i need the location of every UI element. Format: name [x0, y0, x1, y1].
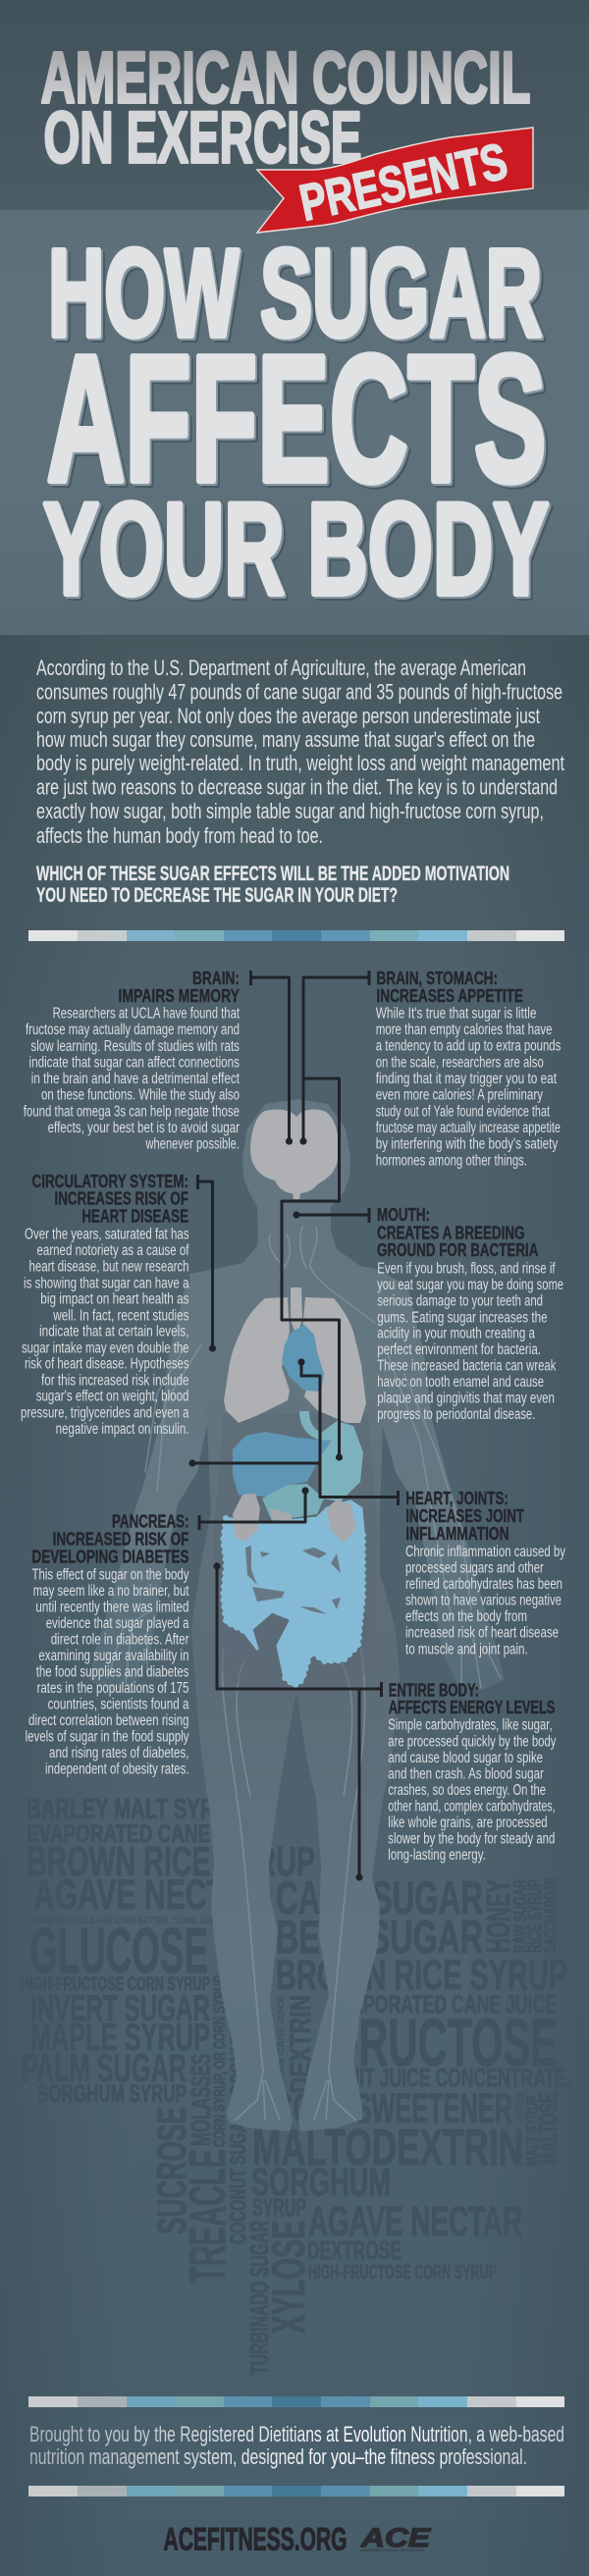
callout: mouth	[377, 1204, 563, 1423]
organ: heart	[282, 1325, 324, 1392]
organ: kidneys and pancreas	[233, 1494, 356, 1543]
heading: heart joints: INFLAMMATION	[405, 1523, 509, 1544]
word cloud: sugar names	[21, 1794, 571, 2375]
text: brain body: indicate that sugar can affect connections	[29, 1055, 240, 1072]
text block: footer credit	[29, 2422, 564, 2469]
connector lines	[188, 971, 399, 1881]
connector: pancreas	[199, 1487, 309, 1530]
text: brain stomach body: While It's true that sugar is little	[376, 1005, 536, 1022]
word cloud: sugar names: RAW SUGAR	[510, 1879, 530, 1953]
heading: brain: IMPAIRS MEMORY	[118, 985, 240, 1006]
word cloud: sugar names: GLUCOSE	[29, 1915, 208, 1986]
text: pancreas body: independent of obesity rates.	[45, 1761, 188, 1777]
body: veins	[108, 1227, 501, 2120]
text: circulatory body: earned notoriety as a cause of	[37, 1242, 189, 1259]
text: pancreas body: countries, scientists found a	[48, 1696, 189, 1712]
panel: main background	[0, 635, 589, 2576]
text: heart joints body	[405, 1544, 565, 1657]
text: brain stomach body: hormones among other things.	[376, 1152, 527, 1169]
text: circulatory body: Over the years, saturated fat has	[25, 1227, 189, 1243]
text: brain body: Researchers at UCLA have found that	[53, 1005, 241, 1022]
connector: mouth	[293, 1208, 369, 1223]
organ: duodenum	[262, 1484, 324, 1521]
text: brain body: in the brain and have a detrimental effect	[31, 1071, 241, 1087]
colour strip: top	[28, 930, 564, 941]
text: pancreas body: evidence that sugar played a	[46, 1615, 189, 1632]
heading: mouth: MOUTH:	[377, 1204, 430, 1225]
icon: ACE logo: ACE	[360, 2523, 431, 2552]
word cloud: sugar names: SUCROSE	[148, 2107, 194, 2234]
text: circulatory body: big impact on heart health as	[40, 1291, 189, 1308]
body: arms	[88, 1269, 505, 1690]
organ: lungs	[224, 1288, 366, 1423]
word cloud: sugar names: DEXTRIN	[285, 1995, 317, 2093]
text: brain body: whenever possible.	[145, 1136, 240, 1153]
word cloud: sugar names: MALTOSE	[533, 2093, 562, 2165]
text: circulatory body	[21, 1227, 189, 1438]
heading: question: YOU NEED TO DECREASE THE SUGAR IN YOUR DIET?	[36, 883, 398, 907]
heading: brain stomach: INCREASES APPETITE	[377, 985, 523, 1006]
ribbon: presents: PRESENTS	[294, 133, 512, 233]
text: pancreas body: until recently there was limited	[35, 1600, 189, 1616]
text: brain stomach body	[376, 1005, 562, 1169]
heading: brain stomach: BRAIN, STOMACH:	[377, 968, 498, 988]
organ: esophagus and stomach	[299, 1411, 363, 1501]
word cloud: sugar names: BARLEY MALT SYRUP	[27, 1794, 242, 1825]
heading: brain	[118, 968, 240, 1006]
heading: question	[36, 862, 509, 907]
organ: brain	[250, 1109, 339, 1199]
heading: American Council on Exercise	[41, 37, 530, 179]
heading: circulatory system: CIRCULATORY SYSTEM:	[31, 1171, 188, 1191]
word cloud: sugar names: XYLOSE	[262, 2221, 314, 2334]
heading: entire body: ENTIRE BODY:	[389, 1679, 479, 1700]
colour strip: bottom	[28, 2486, 564, 2497]
heading: mouth: CREATES A BREEDING	[377, 1222, 525, 1242]
heading: circulatory system: HEART DISEASE	[81, 1206, 188, 1227]
heading: pancreas: PANCREAS:	[112, 1511, 188, 1532]
word cloud: sugar names: RICE SYRUP	[525, 1879, 546, 1953]
heading: pancreas: INCREASED RISK OF	[53, 1528, 188, 1549]
text: pancreas body: the food supplies and diabetes	[36, 1663, 189, 1680]
text: mouth body	[377, 1260, 563, 1423]
callout: pancreas	[26, 1511, 189, 1777]
callout: entire body	[388, 1679, 557, 1864]
callout: heart and joints	[405, 1488, 565, 1657]
text: mouth body: acidity in your mouth creating a	[377, 1325, 535, 1341]
organ: intestine gaps	[245, 1546, 341, 1614]
text: brain body: effects, your best bet is to avoid sugar	[48, 1120, 240, 1136]
footer: website address: ACEFITNESS.ORG	[163, 2522, 348, 2557]
organ: intestines	[223, 1501, 363, 1686]
text: brain body: found that omega 3s can help negate those	[24, 1103, 240, 1120]
text: circulatory body: pressure, triglycerides and even a	[21, 1404, 189, 1421]
heading: pancreas: DEVELOPING DIABETES	[31, 1546, 188, 1566]
text: circulatory body: sugar's effect on weight, blood	[36, 1389, 189, 1405]
text block: introduction	[36, 656, 565, 848]
text: mouth body: progress to periodontal disease.	[377, 1406, 535, 1423]
text: pancreas body: and rising rates of diabetes,	[49, 1745, 188, 1761]
panel: header band	[0, 0, 589, 210]
heading: American Council on Exercise: ON EXERCISE	[43, 96, 361, 179]
organ: darker abdominal cavity	[214, 1413, 378, 1698]
connector: circulatory system	[198, 1175, 216, 1352]
text: circulatory body: for this increased risk include	[41, 1372, 188, 1389]
text: brain body	[24, 1005, 241, 1153]
text: heart joints body: processed sugars and other	[405, 1560, 544, 1577]
text: circulatory body: negative impact on insulin.	[56, 1421, 188, 1438]
title: How Sugar Affects Your Body	[43, 224, 549, 622]
word cloud: sugar names: AGAVE NECTAR	[33, 1871, 265, 1919]
text: pancreas body: may seem like a no brainer, but	[33, 1583, 189, 1600]
word cloud: sugar names: SORGHUM	[251, 2161, 391, 2204]
text: entire body body	[388, 1717, 557, 1864]
heading: heart joints: HEART, JOINTS:	[405, 1488, 509, 1508]
heading: brain: BRAIN:	[192, 968, 240, 988]
human body figure	[88, 1099, 505, 2131]
text: entire body body: long-lasting energy.	[388, 1847, 486, 1864]
text: circulatory body: indicate that at certain levels,	[39, 1324, 188, 1341]
text: pancreas body: rates in the populations of 175	[37, 1680, 188, 1697]
word cloud: sugar names: EVAPORATED CANE JUICE	[27, 1820, 270, 1848]
connector: brain	[251, 971, 293, 1145]
word cloud: sugar names: SORGHUM SYRUP	[37, 2080, 187, 2108]
word cloud: sugar names: CANE CRYSTALS FOR EVEN BETTER, "CANE JUICE CRYSTALS"	[31, 1916, 267, 1925]
word cloud: sugar names: MALT SYRUP	[524, 2095, 541, 2166]
word cloud: sugar names: HIGH-FRUCTOSE CORN SYRUP	[21, 1974, 210, 1995]
word cloud: sugar names: SYRUP	[252, 2194, 306, 2222]
word cloud: sugar names: RAW CANE JUICE	[276, 1995, 286, 2080]
word cloud: sugar names: INVERT SUGAR	[30, 1988, 210, 2028]
ribbon: presents	[257, 128, 533, 233]
heading: heart joints: INCREASES JOINT	[405, 1505, 524, 1526]
word cloud: sugar names: LACTOSE	[514, 2092, 526, 2123]
text: circulatory body: is showing that sugar can have a	[24, 1275, 189, 1291]
text: pancreas body: examining sugar availability in	[38, 1648, 189, 1664]
word cloud: sugar names: MAPLE SYRUP	[30, 2017, 210, 2059]
text: heart joints body: effects on the body from	[405, 1608, 527, 1625]
heading: heart joints	[405, 1488, 524, 1544]
word cloud: sugar names: CORN SYRUP, OR CORN SYRUP	[210, 1975, 229, 2147]
word cloud: sugar names: COCONUT SUGAR COCONUT	[226, 2031, 250, 2244]
colour strip: lower	[28, 2396, 564, 2407]
heading: pancreas	[31, 1511, 188, 1566]
heading: circulatory system: INCREASES RISK OF	[55, 1188, 188, 1209]
text: pancreas body: This effect of sugar on the body	[31, 1566, 189, 1583]
callout: circulatory system	[21, 1171, 189, 1438]
heading: brain stomach	[377, 968, 523, 1006]
text: circulatory body: heart disease, but new research	[29, 1259, 188, 1276]
word cloud: sugar names: DEXTROSE	[307, 2235, 402, 2265]
word cloud: sugar names: TREACLE	[180, 2149, 237, 2284]
word cloud: sugar names: HONEY	[480, 1879, 516, 1953]
word cloud: sugar names: CANE SUGAR	[276, 1871, 483, 1923]
text: heart joints body: to muscle and joint pain.	[405, 1641, 528, 1657]
callout: brain impairs memory	[24, 968, 241, 1153]
text: pancreas body: direct role in diabetes. After	[51, 1631, 189, 1648]
text: pancreas body: levels of sugar in the food supply	[26, 1729, 189, 1746]
text: circulatory body: well. In fact, recent studies	[53, 1307, 189, 1324]
heading: entire body	[389, 1679, 555, 1717]
callout: brain stomach increases appetite	[376, 968, 562, 1169]
connector: heart and joints	[188, 1358, 399, 1505]
text: circulatory body: risk of heart disease. Hypotheses	[25, 1356, 189, 1373]
text: pancreas body: direct correlation between rising	[28, 1712, 188, 1729]
text: pancreas body	[26, 1566, 189, 1777]
connector: brain and stomach	[282, 971, 369, 1461]
text: circulatory body: sugar intake may even double the	[22, 1340, 188, 1356]
word cloud: sugar names: BEET SUGAR	[276, 1911, 483, 1963]
connector: entire body	[213, 1562, 381, 1881]
word cloud: sugar names: MOLASSES	[186, 2054, 216, 2146]
word cloud: sugar names: PALM SUGAR	[22, 2047, 187, 2090]
heading: mouth	[377, 1204, 538, 1260]
organ: liver	[233, 1432, 332, 1497]
word cloud: sugar names: TURBINADO SUGAR	[244, 2221, 274, 2375]
text block: introduction: affects the human body from head to toe.	[36, 823, 323, 848]
text: brain body: on these functions. While the study also	[41, 1087, 240, 1104]
word cloud: sugar names: BROWN RICE SYRUP	[27, 1838, 315, 1884]
word cloud: sugar names: SACCHAROSE	[541, 1877, 560, 1953]
text: brain body: slow learning. Results of studies with rats	[30, 1038, 240, 1055]
body: head, torso and legs silhouette	[189, 1099, 400, 2131]
panel: title band	[0, 210, 589, 635]
icon: ACE logo: AMERICAN COUNCIL ON EXERCISE	[360, 2548, 425, 2552]
text: brain body: fructose may actually damage memory and	[26, 1022, 240, 1038]
heading: circulatory system	[31, 1171, 188, 1227]
